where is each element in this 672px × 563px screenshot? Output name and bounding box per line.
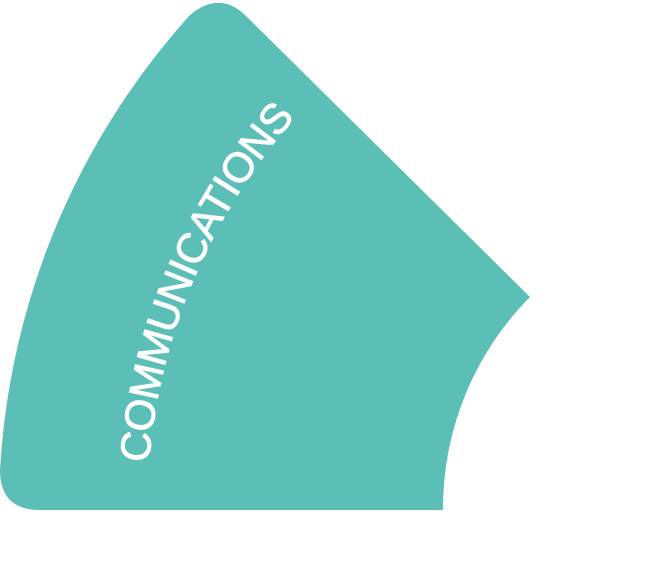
panel: teal wedge segment <box>0 3 530 510</box>
heading: COMMUNICATIONS curved label: COMMUNICATIONS <box>120 103 292 460</box>
